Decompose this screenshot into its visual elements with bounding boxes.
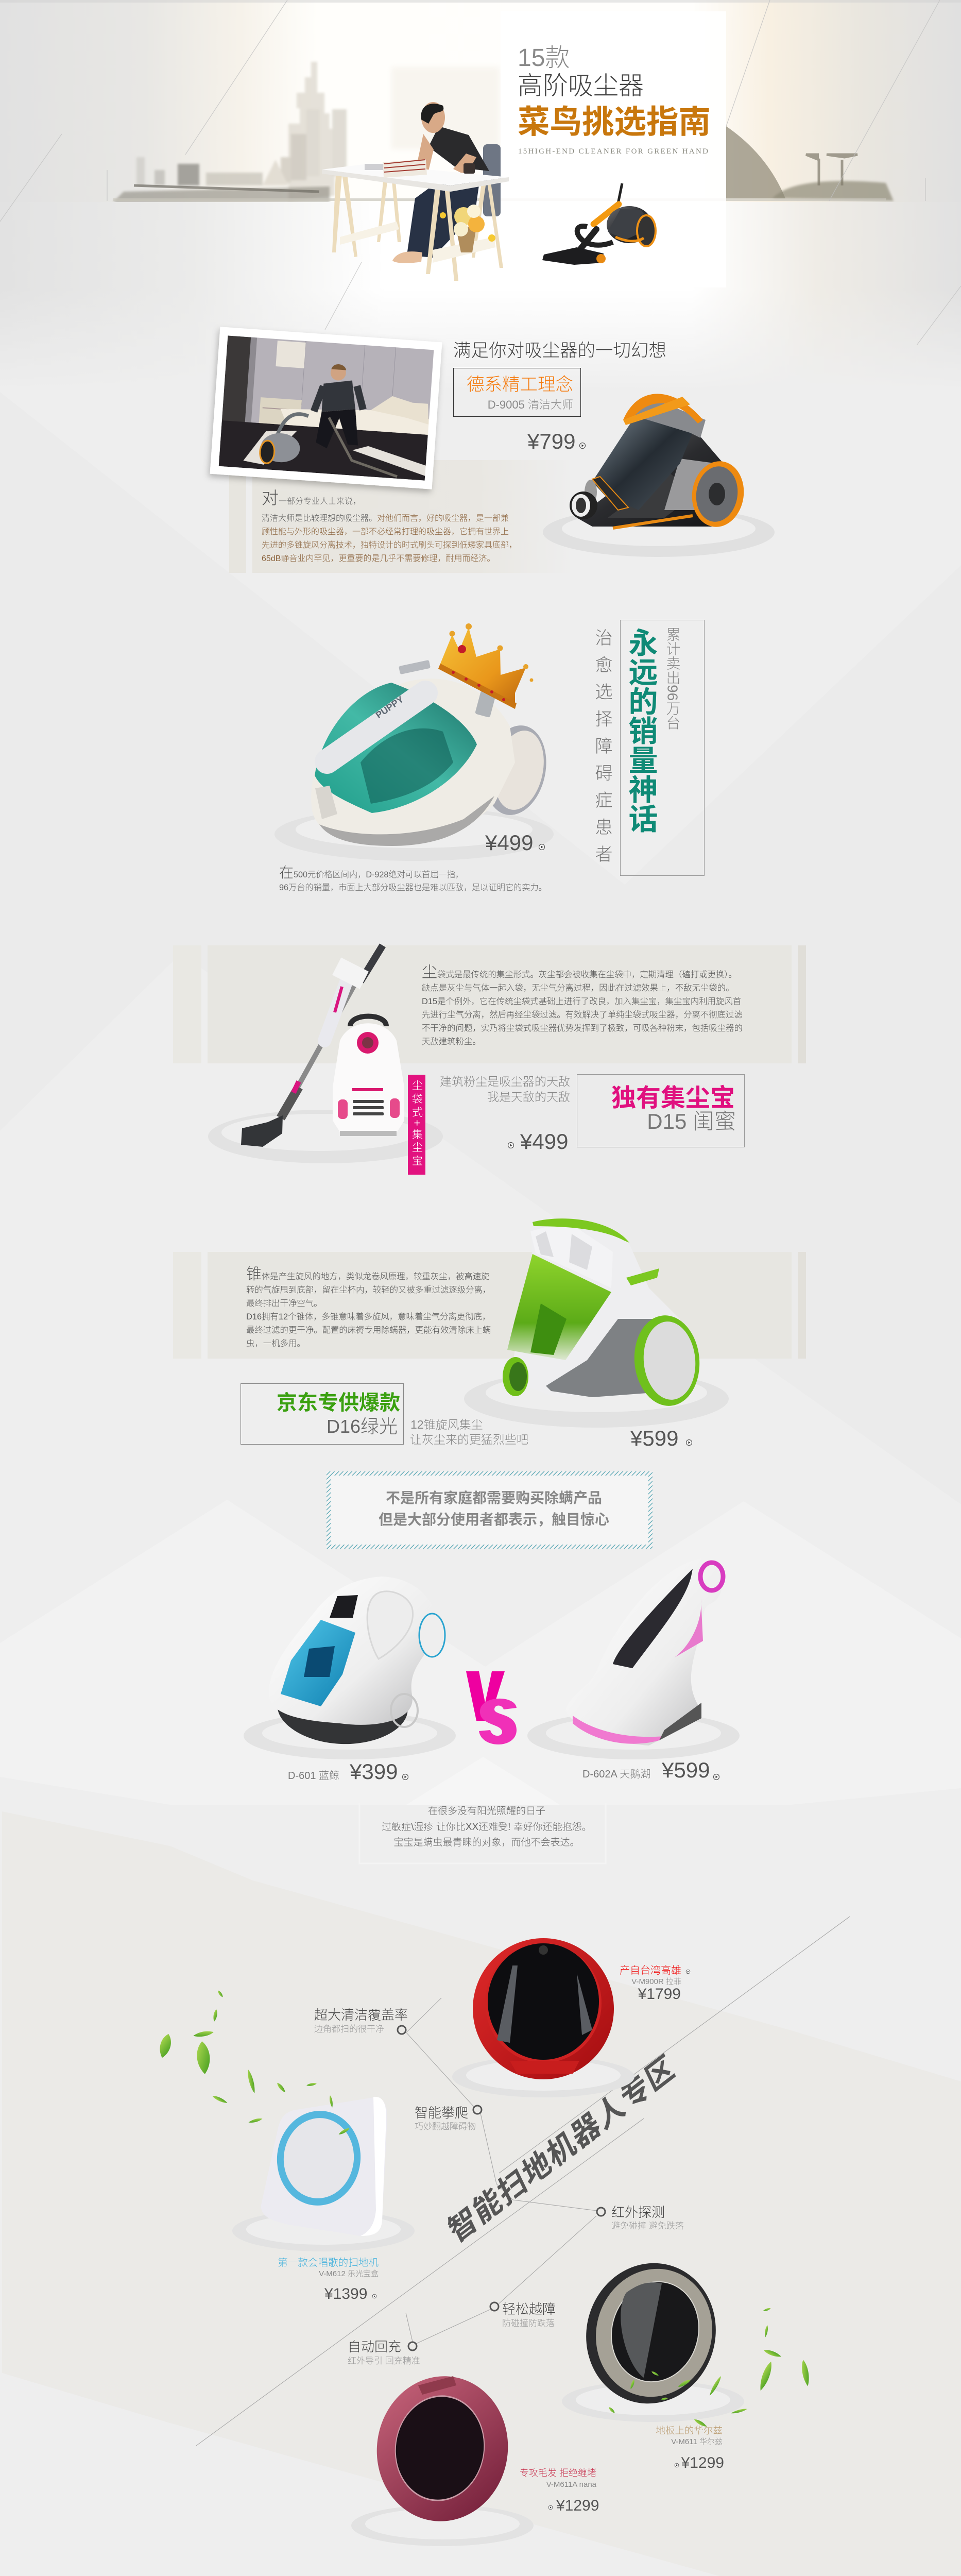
title box: 永远的销量神话 — [624, 628, 658, 833]
allergy note: 在很多没有阳光照耀的日子 — [428, 1805, 545, 1817]
vacuum D15 — [208, 945, 443, 1163]
notice box: 但是大部分使用者都表示，触目惊心 — [379, 1512, 609, 1528]
feature: obstacle — [490, 2301, 556, 2328]
title box — [241, 1384, 404, 1445]
label V-M611A: 专攻毛发 拒绝缠堵 — [520, 2468, 596, 2478]
slogan: 我是天敌的天敌 — [487, 1090, 570, 1104]
feature: climbing: 智能攀爬 — [415, 2105, 468, 2121]
feature: recharge: 红外导引 回充精准 — [348, 2356, 420, 2366]
description text: 转的气旋甩到底部，留在尘杯内，较轻的又被多重过滤逐级分离， — [246, 1285, 491, 1295]
description text — [279, 865, 547, 892]
hero title: 15HIGH-END CLEANER FOR GREEN HAND — [518, 147, 708, 156]
hero banner — [0, 0, 961, 392]
title box: D16绿光 — [327, 1416, 398, 1437]
description text: 锥体是产生旋风的地方，类似龙卷风原理，较重灰尘，被高速旋 — [246, 1266, 490, 1283]
device D-602A — [527, 1558, 740, 1759]
description text: 不干净的问题，实乃将尘袋式吸尘器优势发挥到了极致，可吸各种粉末，包括吸尘器的 — [422, 1024, 743, 1033]
hero vacuum — [542, 183, 656, 265]
label D-602A: D-602A 天鹅湖 — [582, 1768, 650, 1780]
label V-M611: 地板上的华尔兹 — [656, 2425, 723, 2436]
section: mite removers — [244, 1471, 740, 1863]
pink vertical tag — [408, 1075, 425, 1175]
title box: D15 闺蜜 — [647, 1109, 736, 1133]
description text — [422, 964, 743, 1046]
crown — [438, 623, 534, 709]
label D-602A — [582, 1758, 719, 1782]
section: robot vacuums — [157, 1917, 850, 2546]
vacuum D16 — [464, 1218, 729, 1428]
description text — [262, 488, 517, 563]
description text: 最终过滤的更干净。配置的床褥专用除螨器，更能有效清除床上螨 — [246, 1326, 491, 1335]
label V-M900R: V-M900R 拉菲 — [631, 1977, 681, 1986]
robot V-M611 — [562, 2248, 744, 2422]
label V-M612: ¥1399 — [324, 2285, 367, 2302]
hero man at desk — [322, 102, 509, 281]
robot V-M611A — [351, 2368, 534, 2546]
label V-M900R: 产自台湾高雄 — [620, 1964, 681, 1976]
title box — [620, 620, 705, 876]
section: D-9005 — [210, 327, 775, 573]
hero decorative lines — [0, 0, 961, 345]
feature: coverage — [314, 2007, 408, 2034]
pink vertical tag: 尘袋式+集尘宝 — [411, 1080, 423, 1168]
vacuum D-9005 — [543, 394, 775, 557]
section: D15 — [173, 945, 806, 1175]
vacuum D-928 with crown — [274, 623, 554, 861]
description text: 65dB静音业内罕见，更重要的是几乎不需要修理，耐用而经济。 — [262, 554, 495, 563]
beige text panel — [229, 460, 574, 573]
hero title: 15款 — [518, 44, 570, 72]
description text: 先进的多锥旋风分离技术，独特设计的时式刷头可探到低矮家具底部， — [262, 540, 517, 550]
feature: infrared: 避免碰撞 避免跌落 — [611, 2221, 684, 2231]
label V-M612: 第一款会唱歌的扫地机 — [278, 2257, 379, 2268]
description text: 清洁大师是比较理想的吸尘器。对他们而言，好的吸尘器，是一部兼 — [262, 514, 509, 523]
label V-M611A: ¥1299 — [556, 2497, 599, 2514]
description text: 虫，一机多用。 — [246, 1339, 305, 1348]
text panel — [173, 945, 806, 1063]
price: ¥499 — [520, 1129, 568, 1154]
description text: 先进行尘气分离，然后再经尘袋过滤。有效解决了单纯尘袋式吸尘器，分离不彻底过滤 — [422, 1010, 743, 1020]
robot title: 智能扫地机器人专区 — [444, 2049, 679, 2250]
price: ¥599 — [630, 1426, 678, 1450]
label V-M900R — [620, 1964, 690, 2003]
hero city skyline — [113, 62, 894, 202]
description text: 最终排出干净空气。 — [246, 1299, 322, 1308]
title box: 德系精工理念 — [467, 375, 573, 395]
notice box — [327, 1471, 653, 1549]
feature: climbing: 巧妙翻越障碍物 — [415, 2122, 476, 2131]
feature: climbing — [415, 2105, 482, 2131]
slogan: 建筑粉尘是吸尘器的天敌 — [440, 1075, 570, 1088]
green leaves right — [608, 2307, 811, 2428]
green leaves left — [157, 1990, 350, 2136]
hero title — [518, 44, 711, 156]
feature: obstacle: 轻松越障 — [502, 2301, 556, 2317]
title box: 累计卖出96万台 — [664, 627, 681, 730]
label D-601 — [288, 1759, 408, 1784]
allergy note: 宝宝是螨虫最青睐的对象，而他不会表达。 — [393, 1837, 580, 1848]
product photo — [210, 327, 442, 489]
label V-M612: V-M612 乐光宝盒 — [319, 2269, 379, 2278]
slogan — [440, 1075, 570, 1104]
description text: 天敌建筑粉尘。 — [422, 1037, 481, 1046]
description text: D16拥有12个锥体，多锥意味着多旋风，意味着尘气分离更彻底， — [246, 1312, 490, 1321]
label V-M900R: ¥1799 — [638, 1986, 681, 2003]
feature: obstacle: 防碰撞防跌落 — [502, 2318, 555, 2328]
description text — [246, 1266, 491, 1348]
text panel — [173, 1252, 806, 1359]
description text: D15是个例外，它在传统尘袋式基础上进行了改良，加入集尘宝，集尘宝内利用旋风首 — [422, 997, 741, 1006]
label D-602A: ¥599 — [661, 1758, 710, 1782]
section: D16 — [173, 1218, 806, 1450]
feature: infrared: 红外探测 — [611, 2205, 665, 2220]
section: D-928 best seller — [274, 620, 705, 892]
title box — [577, 1075, 745, 1147]
section heading: 满足你对吸尘器的一切幻想 — [453, 341, 666, 361]
VS mark — [466, 1671, 517, 1744]
title box: 独有集尘宝 — [611, 1084, 735, 1112]
description text: 顾性能与外形的吸尘器，一部不必经常打理的吸尘器，它拥有世界上 — [262, 527, 509, 536]
label V-M612 — [278, 2257, 379, 2302]
description text: 在500元价格区间内，D-928绝对可以首屈一指， — [279, 865, 464, 880]
feature: coverage: 边角都扫的很干净 — [314, 2024, 384, 2034]
device D-601 — [244, 1577, 456, 1759]
price: ¥499 — [485, 831, 533, 855]
allergy note — [359, 1803, 606, 1863]
feature: infrared — [597, 2205, 684, 2231]
allergy note: 过敏症\湿疹 让你比XX还难受! 幸好你还能抱怨。 — [382, 1821, 592, 1833]
hero title: 菜鸟挑选指南 — [518, 104, 711, 140]
title box: 京东专供爆款 — [277, 1392, 400, 1414]
slogan: 让灰尘来的更猛烈些吧 — [410, 1433, 528, 1446]
label D-601: ¥399 — [349, 1759, 398, 1784]
title box: D-9005 清洁大师 — [488, 398, 573, 411]
label V-M611: V-M611 华尔兹 — [671, 2437, 723, 2446]
label V-M611: ¥1299 — [681, 2454, 724, 2471]
label V-M611A: V-M611A nana — [546, 2480, 597, 2489]
robot V-M612 — [232, 2097, 415, 2251]
feature: coverage: 超大清洁覆盖率 — [314, 2007, 408, 2023]
feature: recharge — [348, 2339, 420, 2366]
description text: 缺点是灰尘与气体一起入袋，无尘气分离过程，因此在过滤效果上，不敌无尘袋的。 — [422, 984, 734, 993]
notice box: 不是所有家庭都需要购买除螨产品 — [386, 1490, 602, 1506]
decorative and connector lines — [196, 1917, 850, 2446]
hero flowers — [440, 205, 495, 252]
label V-M611A — [520, 2468, 599, 2514]
feature: recharge: 自动回充 — [348, 2339, 401, 2354]
title box — [453, 368, 581, 416]
label V-M611 — [656, 2425, 724, 2471]
vacuum D-928 with crown: PUPPY — [374, 694, 405, 720]
hero desk — [322, 159, 509, 281]
robot V-M900R — [452, 1938, 634, 2097]
description text: 96万台的销量，市面上大部分吸尘器也是难以匹敌，足以证明它的实力。 — [279, 883, 547, 892]
hero title: 高阶吸尘器 — [518, 72, 644, 100]
description text: 对一部分专业人士来说， — [262, 488, 361, 507]
hero white panel — [501, 11, 726, 287]
slogan — [410, 1418, 528, 1446]
slogan: 12锥旋风集尘 — [410, 1418, 483, 1431]
price: ¥799 — [527, 429, 575, 453]
vertical slogan: 治愈选择障碍症患者 — [592, 629, 612, 872]
description text: 尘袋式是最传统的集尘形式。灰尘都会被收集在尘袋中，定期清理（磕打或更换）。 — [422, 964, 737, 981]
label D-601: D-601 蓝鲸 — [288, 1770, 339, 1782]
